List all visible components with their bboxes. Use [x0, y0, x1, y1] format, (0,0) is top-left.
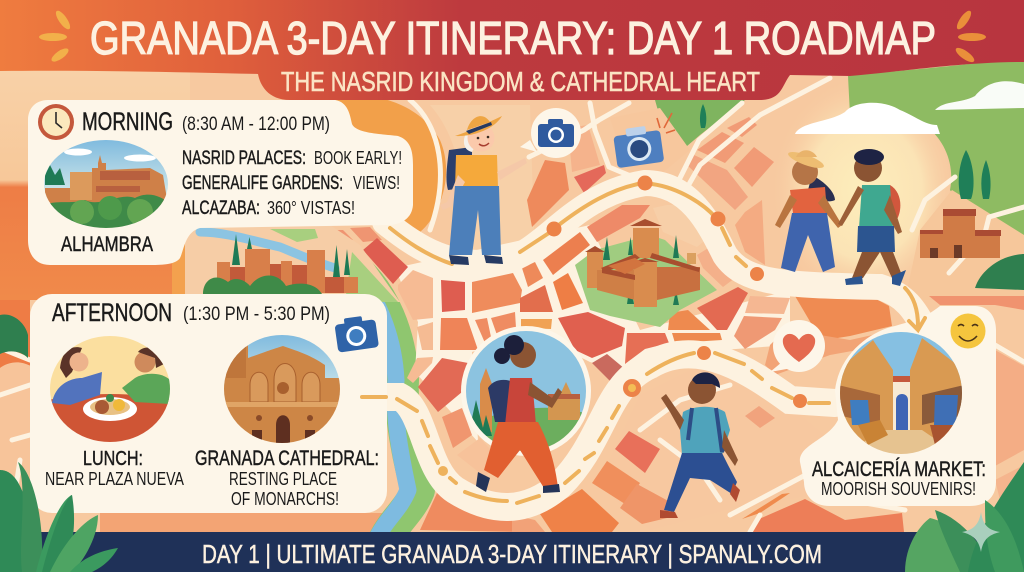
panel: morning [28, 100, 413, 265]
icon: right sparks [954, 9, 986, 65]
leaves bottom left [0, 462, 118, 572]
morning stops list: 360° VISTAS! [267, 198, 355, 218]
person: girl walking [476, 335, 562, 493]
footer [0, 532, 1024, 572]
cathedral label: RESTING PLACE [229, 469, 337, 489]
illustration: girl circle [461, 326, 591, 456]
lower route stops [438, 346, 807, 476]
icon: smiley [950, 314, 986, 348]
lower route markers [362, 353, 829, 503]
lunch label [45, 448, 184, 489]
sparkle [962, 512, 1000, 552]
icon: clock [38, 104, 74, 140]
river [345, 262, 418, 540]
morning stops list [182, 148, 402, 219]
footer text: DAY 1 | ULTIMATE GRANADA 3-DAY ITINERARY | SPANALY.COM [202, 539, 822, 569]
cypress trees [700, 104, 991, 199]
clouds [795, 81, 1024, 134]
cathedral label: GRANADA CATHEDRAL: [195, 447, 379, 470]
illustration: Alhambra [40, 138, 172, 228]
street bed under blocks [395, 225, 790, 472]
fortress hill scene [185, 225, 400, 302]
morning stops list: GENERALIFE GARDENS: [182, 173, 343, 194]
cathedral label [195, 447, 379, 509]
market label: MOORISH SOUVENIRS! [821, 479, 976, 499]
city map blocks [320, 108, 1024, 532]
afternoon time: (1:30 PM - 5:30 PM) [183, 304, 330, 325]
banner [0, 0, 1024, 100]
lunch label: LUNCH: [83, 448, 143, 470]
lower route road [365, 354, 835, 507]
person: couple walking [775, 149, 906, 286]
bush left [0, 314, 28, 358]
lunch label: NEAR PLAZA NUEVA [45, 469, 184, 489]
person: boy running [660, 372, 740, 518]
panel: market bubble [800, 306, 996, 506]
leaves bottom right [905, 462, 1024, 572]
subtitle: THE NASRID KINGDOM & CATHEDRAL HEART [281, 66, 760, 97]
morning stops list: ALCAZABA: [182, 198, 260, 219]
morning time: (8:30 AM - 12:00 PM) [182, 114, 330, 135]
fortress on the map [575, 219, 717, 327]
camera icon [612, 113, 675, 168]
illustration: cathedral [222, 332, 342, 445]
person: explorer with hat [440, 116, 527, 265]
afternoon heading: AFTERNOON [52, 299, 172, 327]
market label [812, 458, 986, 499]
camera bubble [520, 108, 581, 158]
heart bubble [770, 320, 825, 372]
panel: afternoon [30, 294, 387, 513]
morning heading: MORNING [82, 108, 173, 136]
city streets [0, 78, 1024, 532]
Alhambra label: ALHAMBRA [61, 233, 153, 256]
illustration: market alley [838, 330, 964, 456]
morning stops list: NASRID PALACES: [182, 148, 306, 169]
morning stops list: VIEWS! [353, 173, 400, 193]
upper route road [385, 183, 925, 330]
bush right [975, 254, 1024, 290]
icon: left sparks [39, 9, 73, 64]
upper route stops [546, 176, 764, 281]
morning stops list: BOOK EARLY! [314, 148, 402, 168]
illustration: lunch [48, 334, 172, 444]
cathedral label: OF MONARCHS! [231, 489, 339, 509]
upper route markers [390, 184, 925, 330]
camera icon afternoon [334, 314, 379, 353]
village buildings [920, 209, 1001, 258]
